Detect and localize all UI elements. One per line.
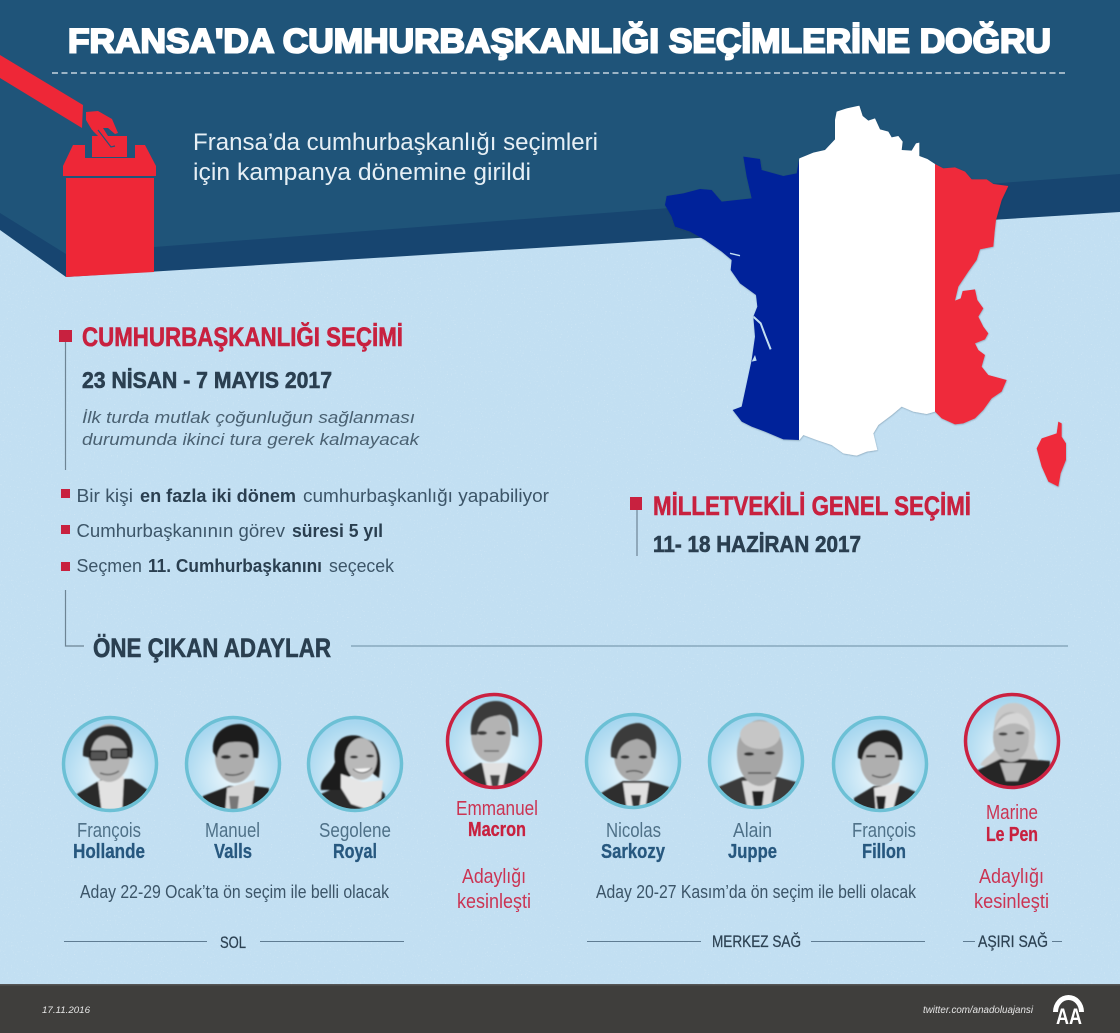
panel: presidential election: İlk turda mutlak çoğunluğun sağlanması	[82, 408, 415, 427]
bullet: 11th president: Seçmen	[76, 556, 142, 576]
candidate: Alain Juppe: Alain	[733, 820, 772, 842]
candidate: Segolene Royal: Royal	[333, 841, 377, 863]
candidate: François Hollande: Hollande	[73, 841, 145, 863]
candidate: Marine Le Pen: Adaylığı	[979, 866, 1044, 888]
bullet: 11th president: 11. Cumhurbaşkanını	[148, 556, 322, 576]
candidate: Marine Le Pen	[966, 694, 1058, 913]
intro text: Fransa’da cumhurbaşkanlığı seçimleri	[193, 129, 598, 156]
candidate: Nicolas Sarkozy: Nicolas	[606, 820, 661, 842]
panel: presidential election: durumunda ikinci tura gerek kalmayacak	[82, 430, 421, 449]
candidate: François Hollande: François	[77, 820, 141, 842]
title: FRANSA'DA CUMHURBAŞKANLIĞI SEÇİMLERİNE DOĞRU	[68, 22, 1051, 60]
panel: presidential election: CUMHURBAŞKANLIĞI SEÇİMİ	[82, 321, 403, 352]
group label: left: SOL	[220, 933, 246, 952]
map: France in tricolour	[660, 100, 1066, 487]
intro text: için kampanya dönemine girildi	[193, 159, 531, 186]
heading: leading candidates	[66, 590, 1068, 663]
group label: centre right: MERKEZ SAĞ	[712, 932, 801, 951]
candidate: Segolene Royal	[308, 718, 402, 863]
candidate: Manuel Valls: Valls	[214, 841, 252, 863]
candidate: Alain Juppe: Juppe	[728, 841, 777, 863]
bullet: 11th president: seçecek	[329, 556, 395, 576]
candidate: Emmanuel Macron: kesinleşti	[457, 891, 531, 913]
candidate: François Hollande	[64, 718, 156, 863]
panel: parliamentary election: MİLLETVEKİLİ GENEL SEÇİMİ	[653, 491, 971, 521]
footer source: twitter.com/anadoluajansi	[923, 1005, 1034, 1016]
candidate: Segolene Royal: Segolene	[319, 820, 391, 842]
map: Corsica	[1037, 422, 1066, 487]
panel: presidential election: 23 NİSAN - 7 MAYIS 2017	[82, 367, 332, 393]
footer date: 17.11.2016	[42, 1005, 91, 1016]
bullet: term length: Cumhurbaşkanının görev	[76, 521, 285, 541]
bullet: term limit	[61, 486, 549, 506]
group label: far right: AŞIRI SAĞ	[978, 932, 1048, 951]
note: right primary: Aday 20-27 Kasım’da ön seçim ile belli olacak	[596, 882, 917, 902]
bullet: term limit: cumhurbaşkanlığı yapabiliyor	[303, 486, 549, 506]
candidate: Marine Le Pen: Marine	[986, 802, 1038, 824]
intro text	[193, 129, 598, 186]
bullet: term length	[61, 521, 383, 541]
note: left primary: Aday 22-29 Ocak’ta ön seçim ile belli olacak	[80, 882, 390, 902]
candidate: François Fillon: François	[852, 820, 916, 842]
panel: parliamentary election: 11- 18 HAZİRAN 2017	[653, 531, 861, 557]
icon: agency logo	[1053, 995, 1084, 1029]
bullet: 11th president	[61, 556, 395, 576]
candidate: Manuel Valls	[186, 718, 280, 863]
candidate: Marine Le Pen: Le Pen	[986, 824, 1038, 846]
candidate: Emmanuel Macron: Macron	[468, 819, 526, 841]
bullet: term limit: en fazla iki dönem	[140, 486, 296, 506]
panel: presidential election	[59, 321, 421, 470]
candidate: Emmanuel Macron: Adaylığı	[462, 866, 526, 888]
bullet: term limit: Bir kişi	[76, 486, 133, 506]
candidate: Marine Le Pen: kesinleşti	[974, 891, 1049, 913]
candidate: François Fillon	[834, 718, 926, 863]
candidate: Nicolas Sarkozy: Sarkozy	[601, 841, 666, 863]
footer bar	[0, 984, 1120, 1033]
candidate: Emmanuel Macron: Emmanuel	[456, 798, 538, 820]
candidate: François Fillon: Fillon	[862, 841, 906, 863]
panel: parliamentary election	[630, 491, 971, 557]
candidate: Manuel Valls: Manuel	[205, 820, 260, 842]
bullet: term length: süresi 5 yıl	[292, 521, 383, 541]
icon: agency logo: AA	[1056, 1004, 1082, 1029]
candidate: Emmanuel Macron	[448, 694, 540, 913]
header band	[0, 0, 1120, 277]
candidate: Nicolas Sarkozy	[586, 714, 680, 863]
icon: hand dropping ballot into box	[0, 55, 156, 277]
heading: leading candidates: ÖNE ÇIKAN ADAYLAR	[93, 633, 331, 663]
candidate: Alain Juppe	[710, 714, 802, 863]
